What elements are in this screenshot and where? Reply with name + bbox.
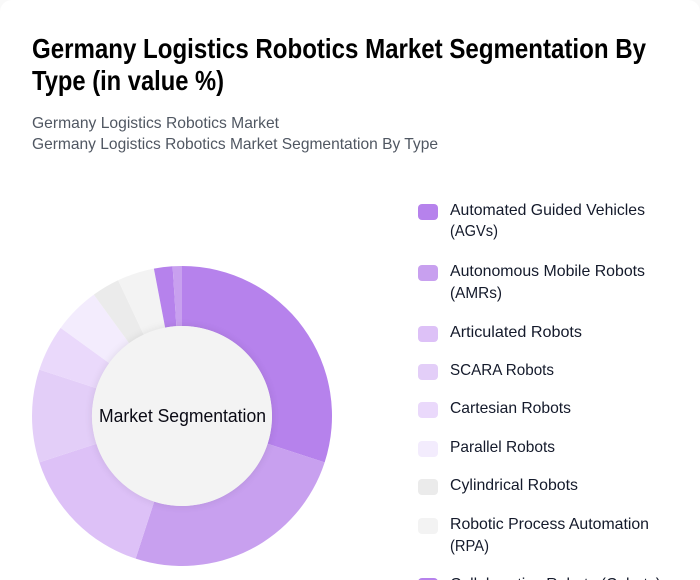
segment: Automated Guided Vehicles 30% [182, 266, 332, 462]
donut chart: market segmentation by type [32, 266, 332, 566]
segment: Robotic Process Automation 4% [118, 269, 165, 335]
legend item: Cylindrical Robots: Cylindrical Robots [450, 477, 578, 494]
segment: Autonomous Mobile Robots 25% [136, 444, 325, 566]
center label: Market Segmentation [99, 406, 266, 426]
legend item: RPA: (RPA) [450, 538, 489, 555]
segment: Cartesian Robots 5% [39, 328, 109, 388]
legend item: Parallel Robots: Parallel Robots [450, 439, 555, 456]
title [32, 33, 646, 96]
legend item: AMRs [418, 263, 645, 302]
segment: Collaborative Robots 2% [154, 266, 176, 328]
legend item: Cartesian Robots: Cartesian Robots [450, 400, 571, 417]
segment: Parallel Robots 5% [61, 295, 129, 363]
legend item: SCARA Robots: SCARA Robots [450, 362, 554, 379]
legend item: AMRs: Autonomous Mobile Robots [450, 263, 645, 280]
center circle [92, 326, 272, 506]
legend item: AMRs: (AMRs) [450, 285, 502, 302]
title: Type (in value %) [32, 65, 224, 96]
legend item: Articulated Robots: Articulated Robots [450, 324, 582, 341]
segment: other types 1% [173, 266, 182, 326]
legend item: RPA [418, 516, 649, 555]
segment: SCARA Robots 10% [32, 370, 96, 462]
legend [418, 202, 661, 580]
subtitle [32, 115, 438, 153]
legend item: AGVs: Automated Guided Vehicles [450, 202, 645, 219]
subtitle: Germany Logistics Robotics Market [32, 115, 280, 132]
segment: Articulated Robots 15% [39, 444, 154, 559]
subtitle: Germany Logistics Robotics Market Segmentation By Type [32, 136, 438, 153]
legend item: AGVs [418, 202, 645, 240]
segment: Cylindrical Robots 3% [94, 280, 144, 343]
legend item: SCARA Robots [418, 362, 554, 380]
legend item: AGVs: (AGVs) [450, 223, 498, 240]
legend item: RPA: Robotic Process Automation [450, 516, 649, 533]
